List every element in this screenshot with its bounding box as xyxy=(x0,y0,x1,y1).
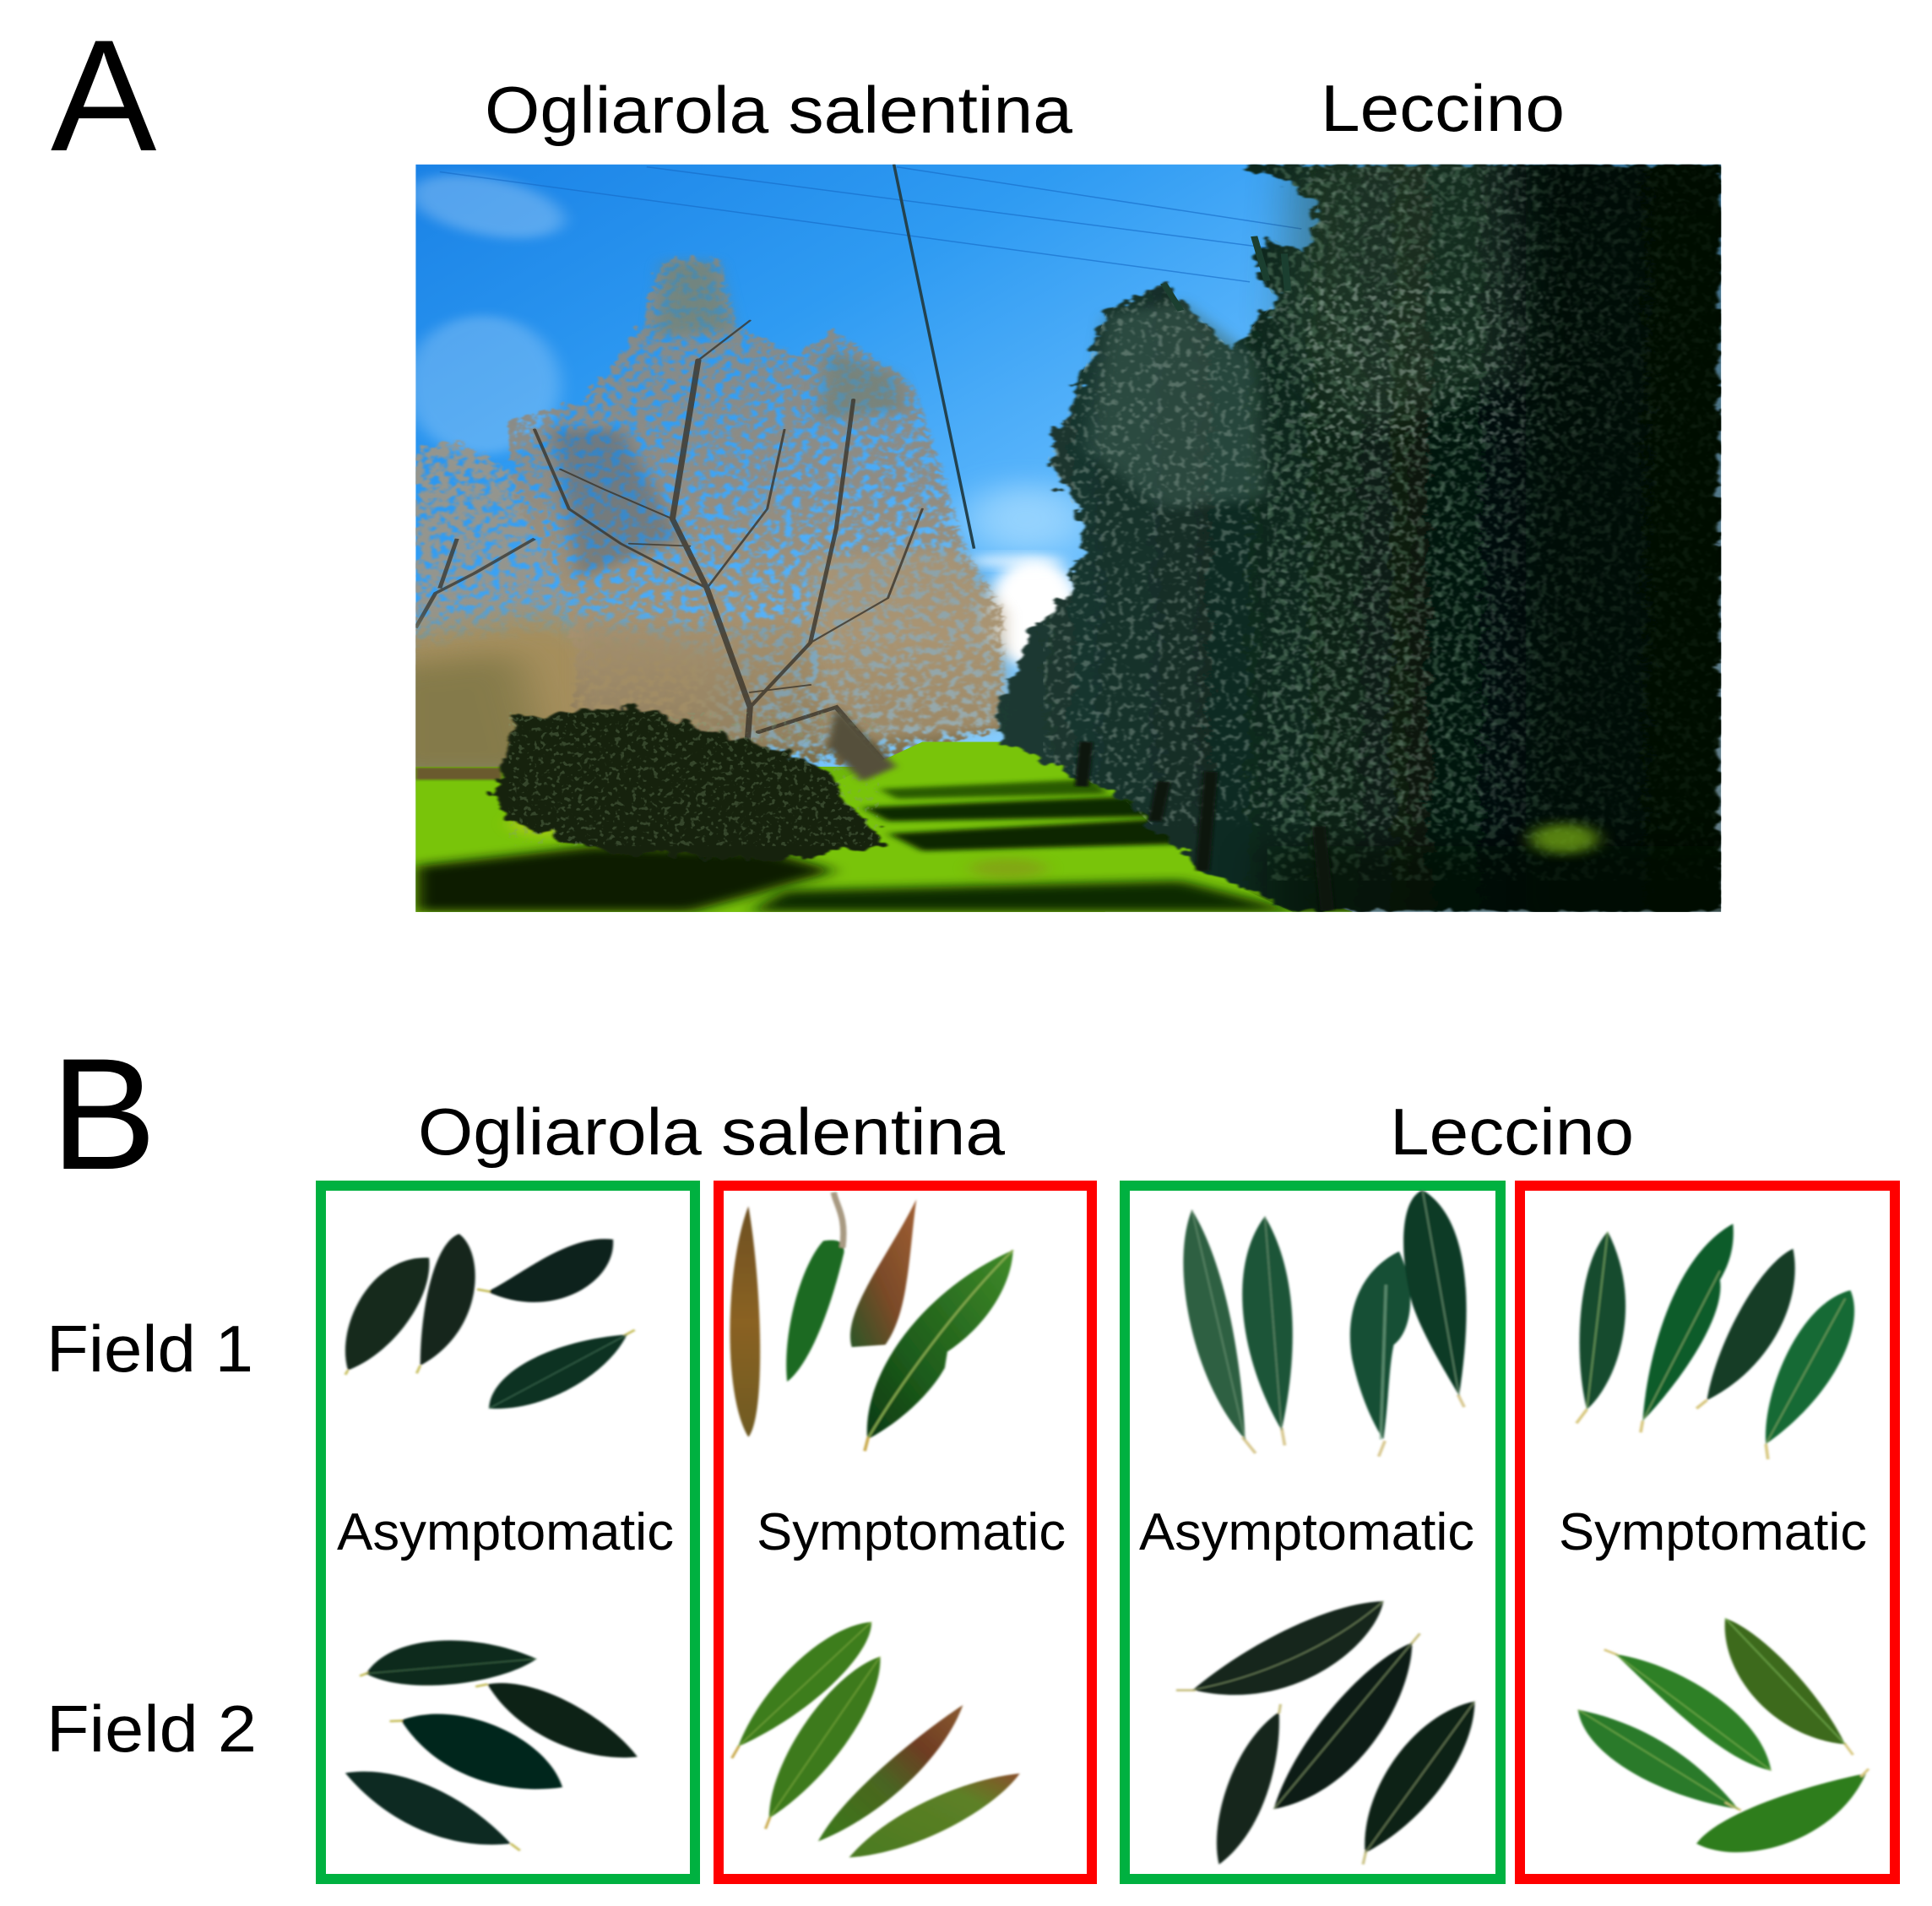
leaves: field 1 xyxy=(345,1234,635,1409)
panel label A: A xyxy=(51,7,157,184)
heading: Leccino, panel B: Leccino xyxy=(1390,1094,1634,1169)
heading: Ogliarola salentina, panel A: Ogliarola salentina xyxy=(485,73,1073,147)
leaves: field 1 xyxy=(730,1192,1013,1451)
panel: Leccino symptomatic xyxy=(1520,1186,1895,1879)
leaves: field 1 xyxy=(1183,1190,1467,1457)
panel: Ogliarola salentina symptomatic xyxy=(719,1186,1092,1879)
row label: Field 1: Field 1 xyxy=(46,1311,253,1386)
row label: Field 2: Field 2 xyxy=(46,1692,257,1766)
panel: Leccino asymptomatic xyxy=(1125,1186,1501,1879)
leaves: field 2 xyxy=(345,1640,638,1850)
leaves: field 2 xyxy=(1578,1618,1869,1852)
leaves: field 2 xyxy=(1176,1601,1474,1865)
leaves: field 2 xyxy=(732,1622,1020,1858)
label: Asymptomatic: Asymptomatic xyxy=(1139,1503,1474,1561)
leaves: field 1 xyxy=(1577,1224,1854,1459)
panel label B: B xyxy=(51,1025,156,1203)
panel: Ogliarola salentina asymptomatic xyxy=(321,1186,695,1879)
label: Symptomatic: Symptomatic xyxy=(1559,1503,1867,1561)
label: Asymptomatic: Asymptomatic xyxy=(337,1503,674,1561)
photo: olive grove with dead Ogliarola trees and healthy Leccino trees xyxy=(415,164,1721,912)
label: Symptomatic: Symptomatic xyxy=(757,1503,1066,1561)
heading: Leccino, panel A: Leccino xyxy=(1321,71,1565,145)
heading: Ogliarola salentina, panel B: Ogliarola salentina xyxy=(418,1094,1006,1169)
